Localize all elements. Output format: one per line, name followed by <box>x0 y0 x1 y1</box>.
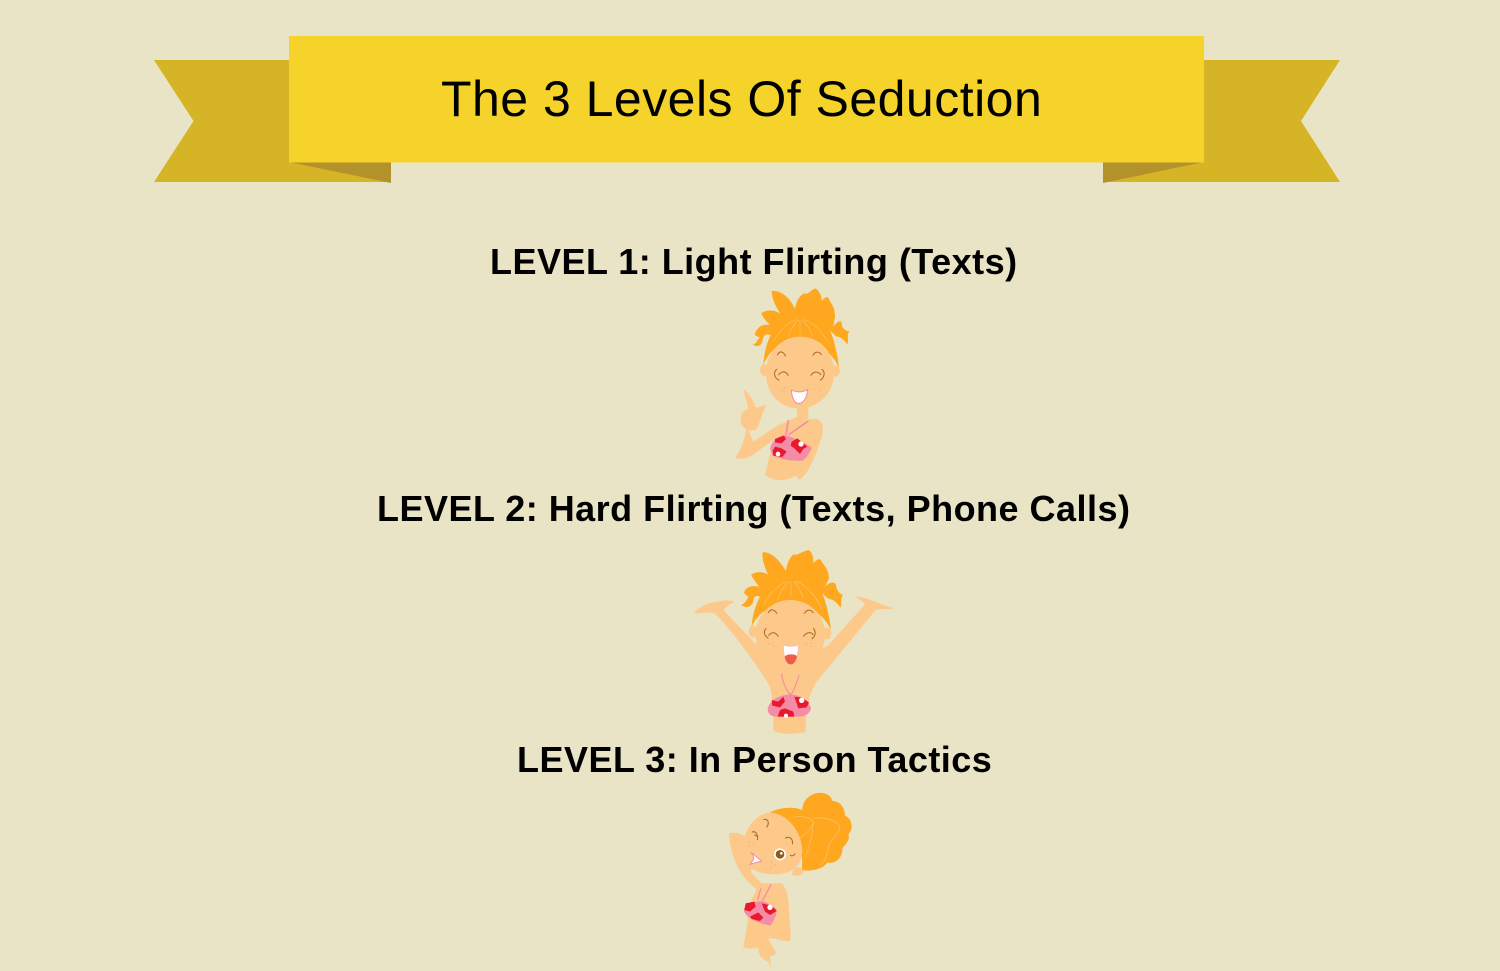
character: level 3 head tilted <box>729 793 852 968</box>
character: level 1 pointing up <box>735 288 849 480</box>
heading: level 1: LEVEL 1: Light Flirting (Texts) <box>490 241 1018 282</box>
heading: level 3: LEVEL 3: In Person Tactics <box>517 739 992 780</box>
title: The 3 Levels Of Seduction <box>441 71 1042 127</box>
character: level 2 arms raised <box>694 550 894 734</box>
title banner <box>154 36 1340 183</box>
heading: level 2: LEVEL 2: Hard Flirting (Texts, Phone Calls) <box>377 488 1130 529</box>
